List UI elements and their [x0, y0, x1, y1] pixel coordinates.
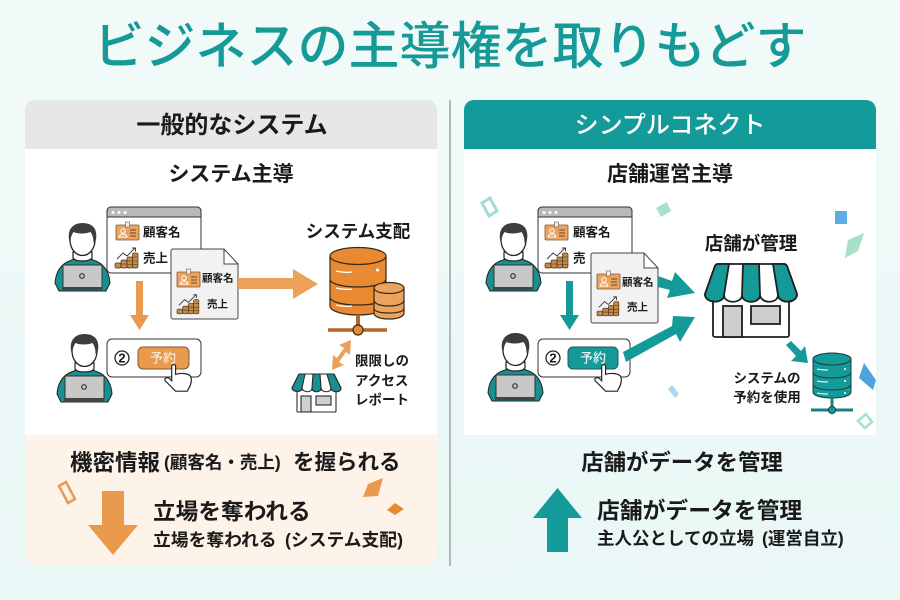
panel heading: 一般的なシステム — [136, 112, 328, 139]
limited access report text: アクセス — [355, 373, 408, 388]
browser window with customer data: 売 — [573, 250, 586, 266]
callout: own position: 主人公としての立場 — [597, 528, 754, 548]
browser window with customer data: 顧客名 — [573, 224, 611, 240]
callout: lose position: (システム支配) — [285, 530, 403, 550]
limited access report text: 限限しの — [355, 353, 409, 368]
subheading: システム主導 — [168, 163, 294, 186]
big arrow to database — [238, 269, 318, 299]
arrow from reservation to store — [623, 316, 695, 362]
document with customer data: 顧客名 — [202, 272, 234, 284]
callout: own position: 店舗がデータを管理 — [597, 498, 802, 524]
decorative confetti right — [482, 198, 876, 428]
divider — [449, 100, 451, 566]
text: uses reservation system — [733, 371, 801, 405]
browser window with customer data: 売上 — [143, 250, 168, 266]
panel: general system — [25, 100, 437, 565]
icon: database orange — [328, 248, 404, 335]
callout: lose position: 立場を奪われる — [153, 530, 277, 550]
small arrow to server — [786, 341, 808, 363]
document with customer data: 顧客名 — [622, 276, 654, 288]
callout: own position — [597, 498, 844, 548]
document with customer data: 売上 — [207, 298, 228, 310]
browser window with customer data — [538, 207, 632, 273]
document with customer data — [171, 249, 238, 319]
two way arrow — [332, 340, 351, 370]
title: ビジネスの主導権を取りもどす — [94, 18, 806, 75]
panel background — [25, 100, 437, 565]
panel: simple connect — [464, 100, 876, 552]
browser window with customer data: 顧客名 — [143, 224, 181, 240]
callout: lose position: 立場を奪われる — [153, 498, 311, 524]
reservation box: 予約 — [150, 350, 176, 366]
icon: server teal — [811, 353, 853, 414]
arrow down large — [88, 491, 138, 555]
document with customer data: 売上 — [627, 300, 648, 314]
label: system control: システム支配 — [306, 222, 411, 242]
bottom band: consequence — [25, 435, 437, 565]
panel heading: シンプルコネクト — [575, 112, 765, 139]
limited access report text: レポート — [355, 392, 409, 407]
icon: store large — [705, 264, 797, 337]
callout: lose position — [153, 498, 403, 550]
panel white body — [464, 149, 876, 435]
consequence heading: 機密情報 — [70, 450, 161, 475]
text: uses reservation system: システムの — [733, 371, 801, 386]
reservation box — [538, 339, 630, 391]
consequence heading: を握られる — [293, 450, 401, 474]
document with customer data — [591, 253, 658, 323]
conclusion heading: 店舗がデータを管理 — [581, 449, 783, 475]
reservation box: 2 — [118, 350, 126, 366]
label: store manages: 店舗が管理 — [705, 233, 798, 254]
reservation box — [107, 339, 201, 391]
browser window with customer data — [107, 207, 201, 273]
reservation box: 予約 — [580, 350, 606, 366]
consequence heading: (顧客名・売上) — [164, 452, 281, 472]
person with laptop bottom — [57, 334, 112, 402]
icon: small store — [292, 374, 341, 412]
text: uses reservation system: 予約を使用 — [733, 389, 801, 405]
callout: own position: (運営自立) — [762, 528, 844, 548]
arrow from document to store — [658, 272, 695, 298]
header band — [25, 100, 437, 149]
person with laptop top — [55, 223, 110, 291]
header band — [464, 100, 876, 149]
arrow up large — [533, 488, 582, 552]
reservation box: 2 — [549, 350, 557, 366]
decorative confetti left — [59, 478, 404, 515]
person with laptop bottom — [488, 333, 543, 401]
arrow down teal — [560, 281, 579, 330]
arrow down orange — [130, 281, 149, 330]
person with laptop top — [486, 223, 541, 291]
subheading: 店舗運営主導 — [607, 163, 733, 186]
